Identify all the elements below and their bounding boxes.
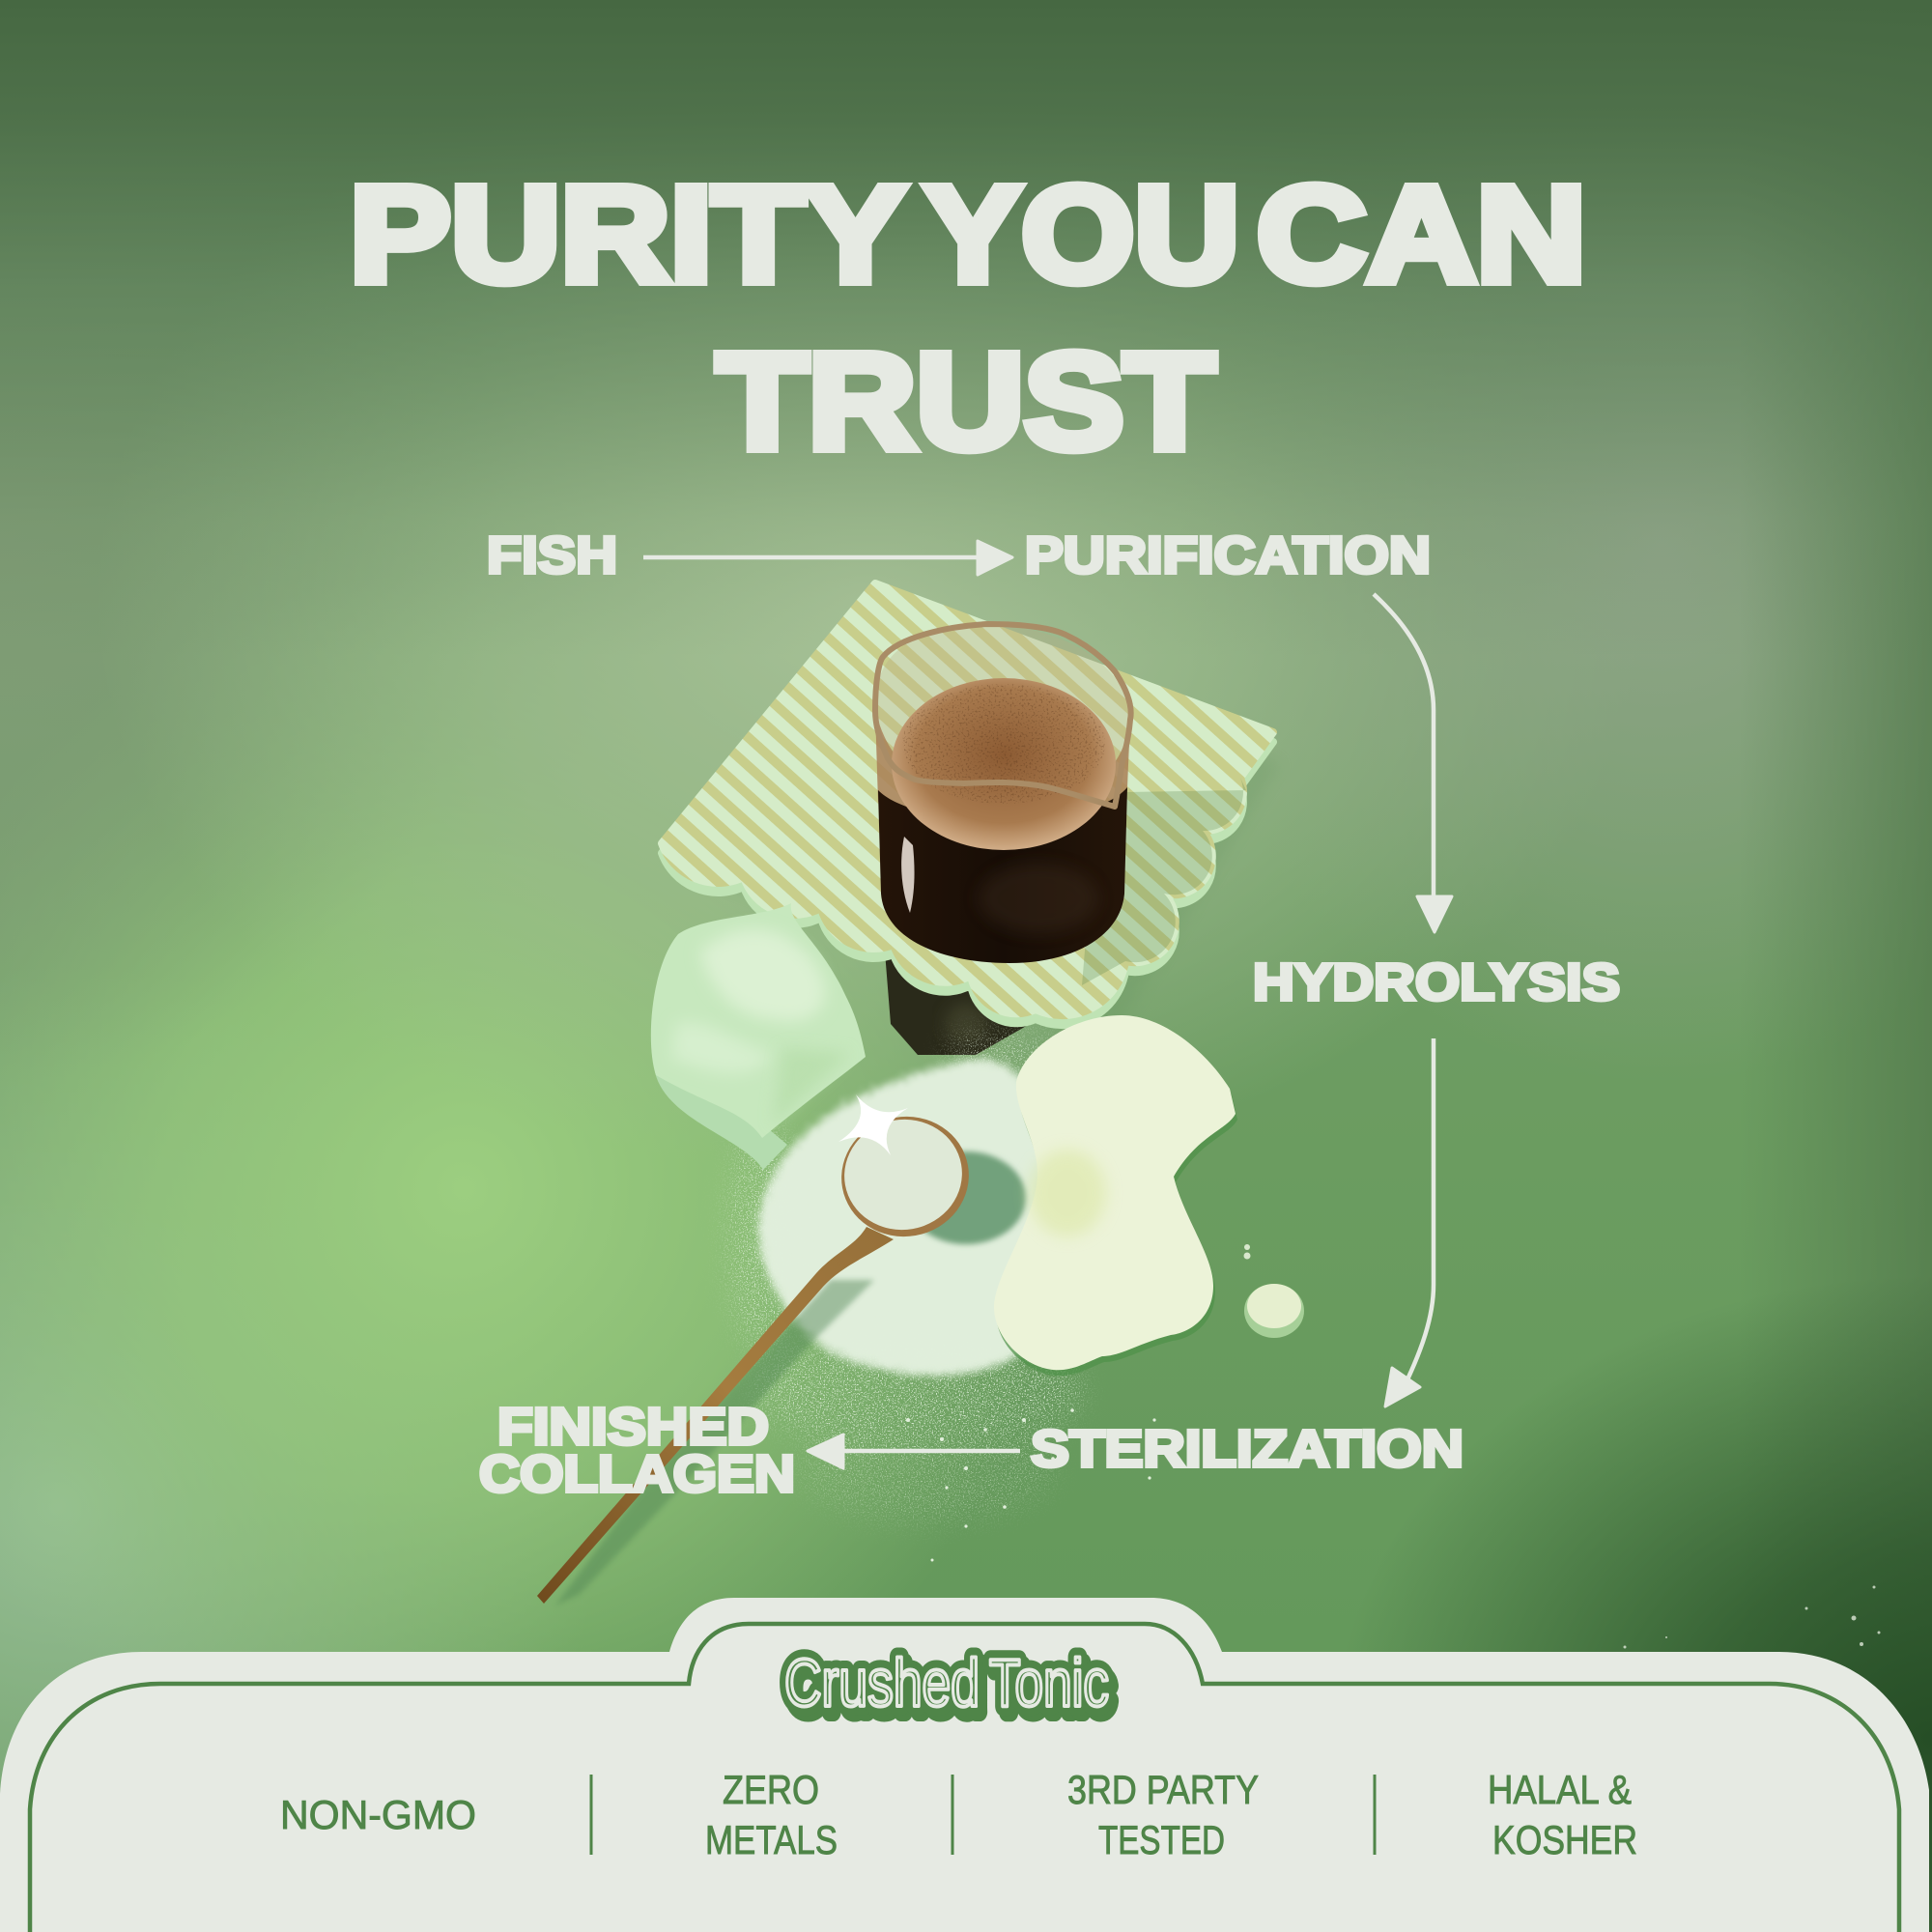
- badge: halal and kosher: [1488, 1767, 1637, 1862]
- title line 1: PURITY: [350, 157, 906, 310]
- divider 3: [1374, 1775, 1376, 1855]
- napkin shadow on table: [676, 618, 1280, 1038]
- sparkle: [838, 1094, 908, 1155]
- beaker reflection on table: [885, 952, 1038, 1055]
- title line 2: TRUST: [717, 325, 1215, 477]
- logo: Crushed Tonic: Crushed: [788, 1651, 983, 1726]
- label: sterilization: STERILIZATION: [1031, 1420, 1463, 1478]
- bottom panel: [0, 1598, 1929, 1932]
- arrow: fish to purification: [643, 541, 1012, 575]
- arrow: purification to hydrolysis: [1374, 594, 1452, 932]
- arrow: sterilization to finished collagen: [808, 1435, 1020, 1468]
- scattered powder grain: [730, 1036, 1082, 1521]
- badge: 3rd party tested: 3RD PARTY: [1067, 1767, 1259, 1812]
- beaker highlights: [901, 837, 1098, 933]
- powder speckles: [906, 1408, 1156, 1561]
- arrow: hydrolysis to sterilization: [1385, 1038, 1434, 1406]
- badge: zero metals: ZERO: [723, 1767, 819, 1812]
- table surface specks: [1623, 1586, 1893, 1731]
- divider 2: [951, 1775, 954, 1855]
- logo: Crushed Tonic: Tonic: [989, 1645, 1109, 1720]
- divider 1: [589, 1775, 593, 1855]
- spoon: [537, 1106, 979, 1604]
- still life photo illustration: [537, 583, 1304, 1605]
- process flow: [479, 526, 1620, 1503]
- crema surface: [892, 678, 1116, 850]
- title line 1: CAN: [1257, 157, 1586, 310]
- label: purification: PURIFICATION: [1025, 526, 1431, 584]
- glass beaker with coffee: [875, 624, 1131, 963]
- badge: zero metals: [705, 1767, 838, 1862]
- badge: zero metals: METALS: [705, 1817, 838, 1862]
- droplet: [1244, 1244, 1304, 1338]
- badge: non-GMO: NON-GMO: [280, 1792, 476, 1837]
- label: finished collagen: [479, 1398, 795, 1503]
- cream dollop: [651, 903, 866, 1170]
- label: finished collagen: FINISHED: [497, 1398, 769, 1456]
- title line 1: YOU: [924, 157, 1239, 310]
- milk puddle: [994, 1015, 1237, 1376]
- striped scalloped napkin: [662, 583, 1273, 1025]
- badge: 3rd party tested: [1067, 1767, 1259, 1862]
- label: finished collagen: COLLAGEN: [479, 1445, 795, 1503]
- panel background: [0, 1598, 1929, 1932]
- spoon shadow: [555, 1151, 1026, 1605]
- beaker rim: [875, 624, 1131, 807]
- badge: 3rd party tested: TESTED: [1098, 1817, 1225, 1862]
- label: fish: FISH: [487, 526, 617, 584]
- logo: Crushed Tonic: Tonic: [993, 1651, 1113, 1726]
- spilled powder: [758, 1060, 1055, 1376]
- label: hydrolysis: HYDROLYSIS: [1253, 953, 1620, 1011]
- logo: Crushed Tonic: Crushed: [784, 1645, 980, 1720]
- title line 1: [350, 157, 1586, 310]
- logo: Crushed Tonic: Crushed: [784, 1645, 980, 1720]
- title: [350, 157, 1586, 477]
- badge: halal and kosher: HALAL &: [1488, 1767, 1632, 1812]
- logo: Crushed Tonic: Tonic: [989, 1645, 1109, 1720]
- badge: halal and kosher: KOSHER: [1492, 1817, 1637, 1862]
- panel inner outline: [30, 1624, 1899, 1932]
